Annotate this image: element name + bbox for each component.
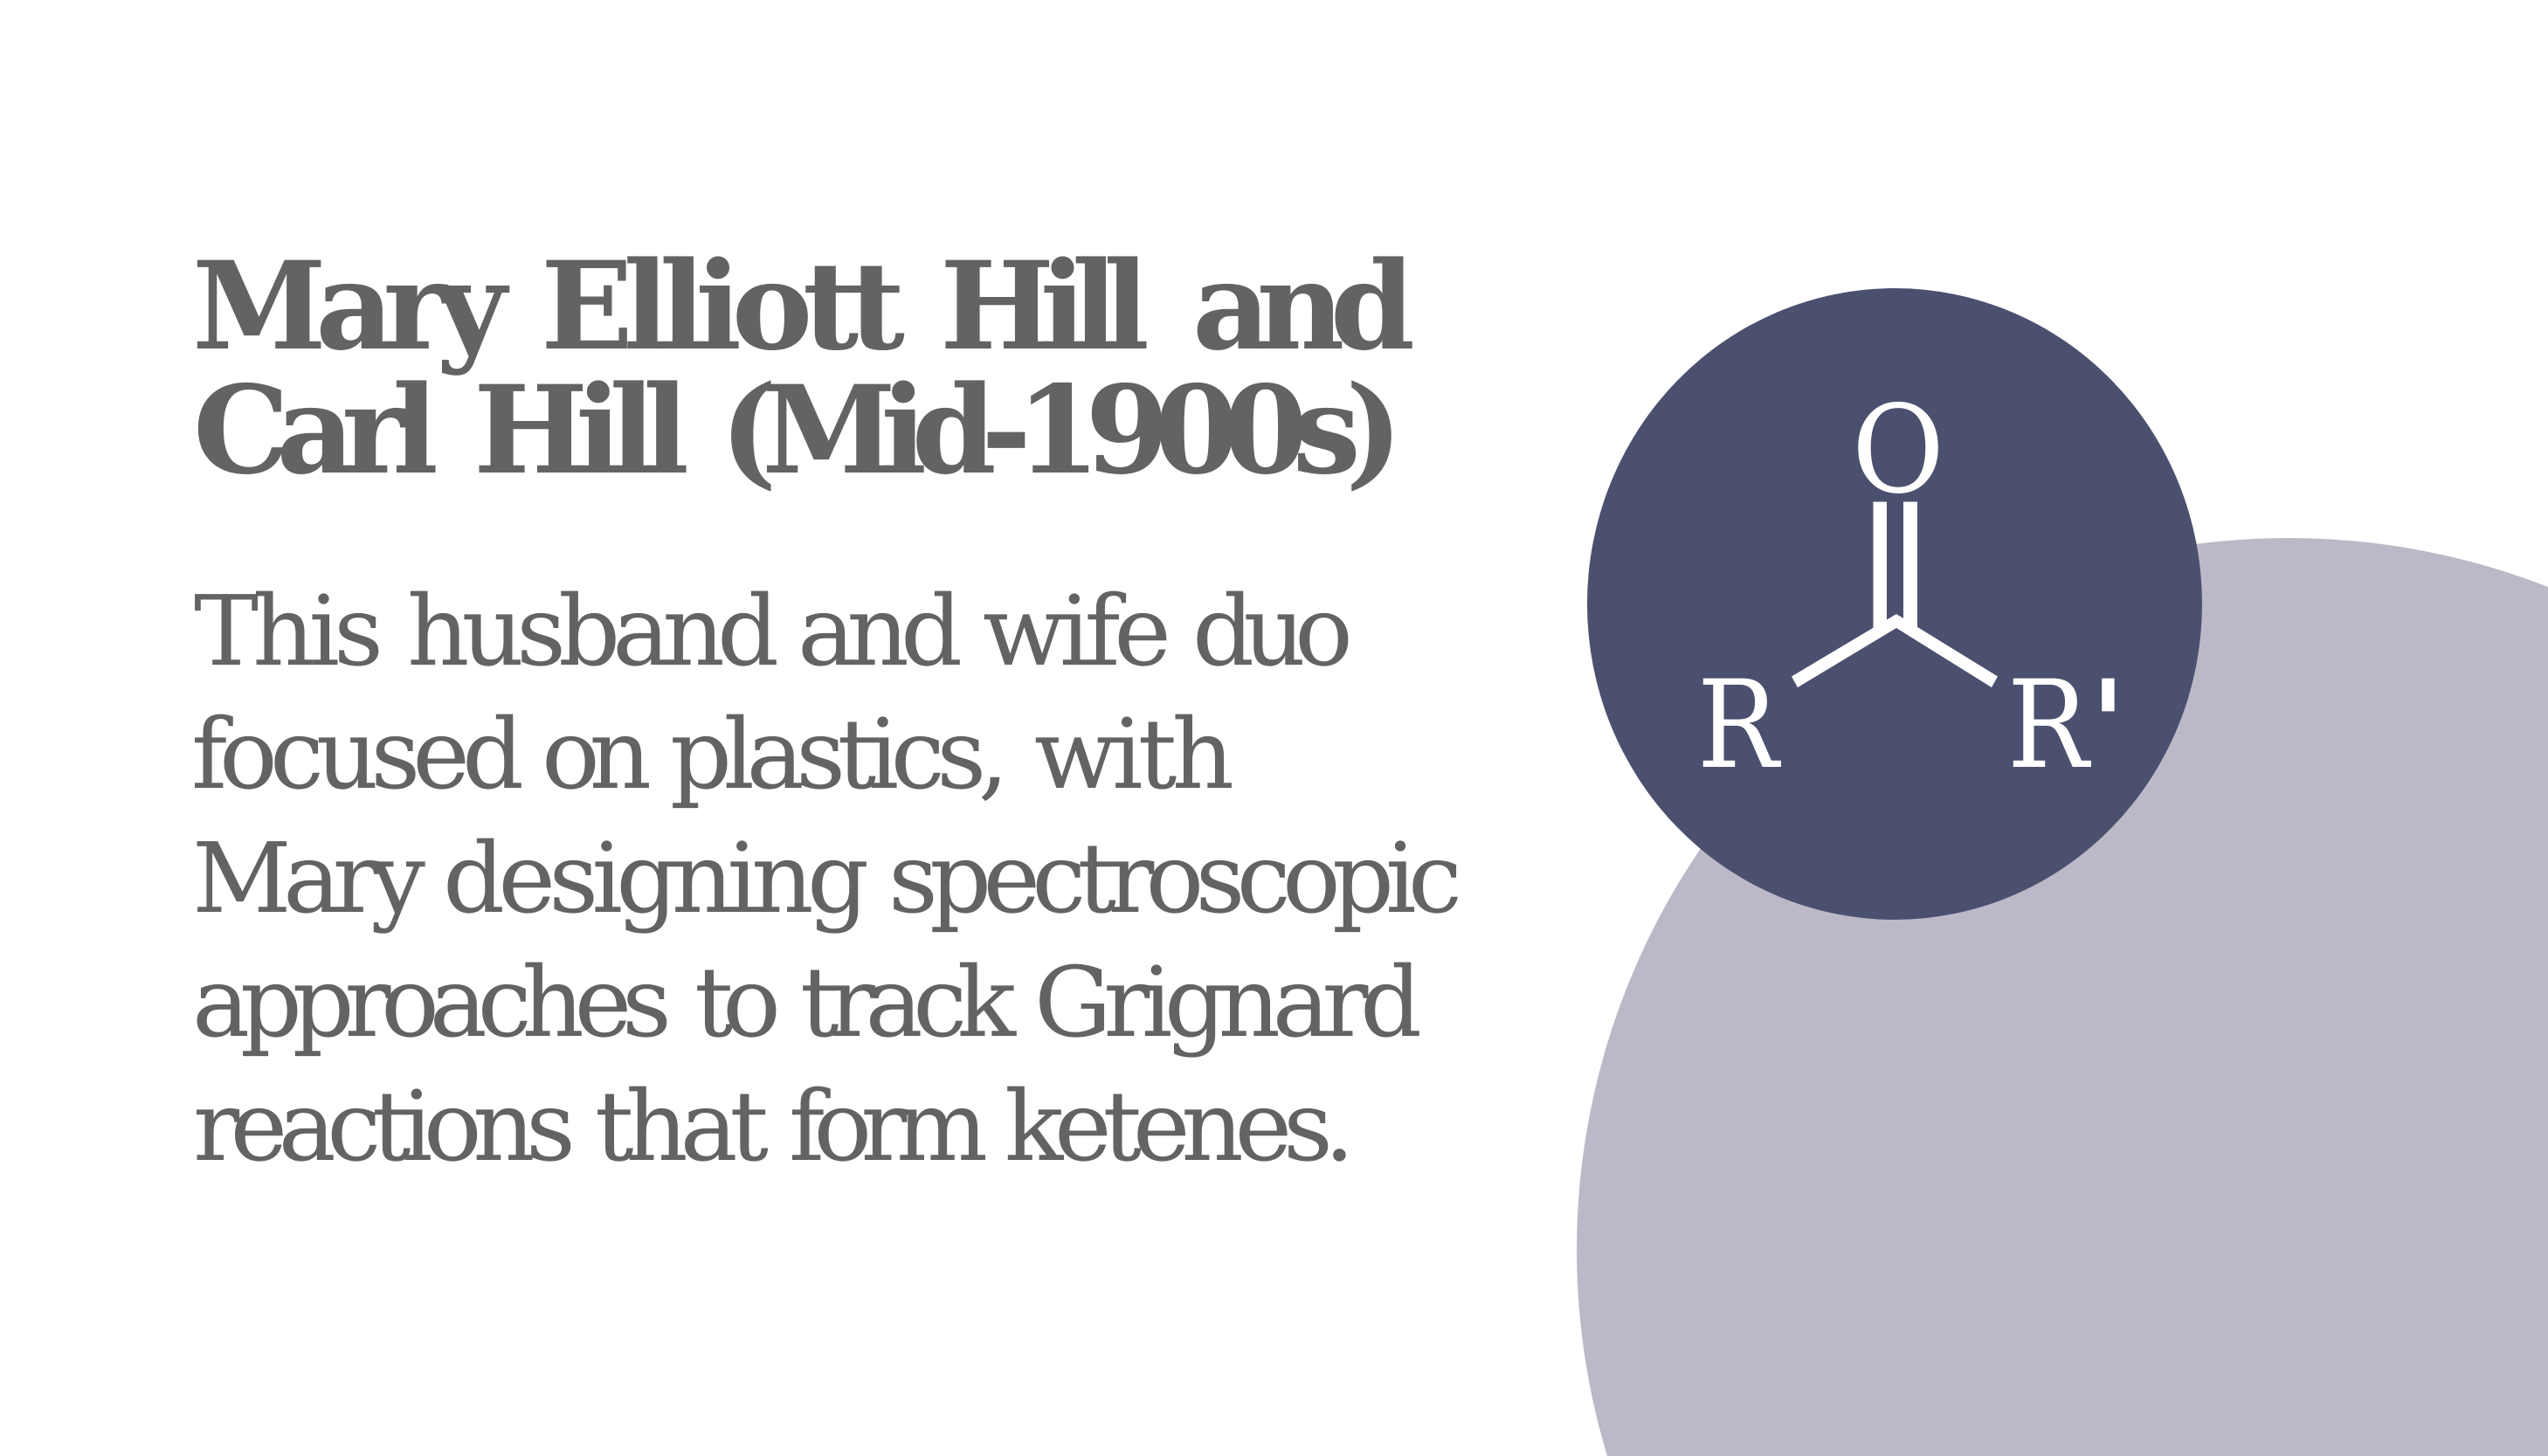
body text: This <box>194 576 383 688</box>
body text: plastics, <box>670 699 1009 811</box>
body text: track <box>800 947 1018 1059</box>
body text: that <box>595 1071 769 1183</box>
body text: focused <box>191 699 524 811</box>
body text: with <box>1034 699 1234 811</box>
body text <box>191 576 1462 1183</box>
atom labels: R <box>1697 654 1781 796</box>
title: Hill <box>473 358 689 501</box>
body text: on <box>542 699 652 811</box>
body text: and <box>798 576 963 688</box>
title <box>192 234 1415 501</box>
title: Elliott <box>541 234 905 377</box>
title: Carl <box>193 358 438 501</box>
body text: form <box>789 1071 988 1183</box>
body text: approaches <box>192 947 672 1059</box>
atom labels: R <box>2007 654 2091 796</box>
background decorative large circle <box>1577 538 2548 1456</box>
title: Mary <box>192 234 510 377</box>
title: and <box>1192 234 1415 377</box>
atom labels: O <box>1852 379 1944 521</box>
title: (Mid-1900s) <box>720 358 1403 501</box>
body text: ketenes. <box>1005 1071 1355 1183</box>
title: Hill <box>940 234 1150 377</box>
dark circle with carbonyl molecule icon <box>1587 288 2202 920</box>
atom labels: ' <box>2086 654 2130 796</box>
body text: reactions <box>193 1071 576 1183</box>
atom labels <box>1697 379 2130 796</box>
body text: wife <box>983 576 1171 688</box>
body text: Mary <box>192 823 425 935</box>
body text: to <box>694 947 781 1059</box>
body text: spectroscopic <box>888 823 1462 935</box>
body text: Grignard <box>1034 947 1422 1059</box>
body text: designing <box>443 823 869 935</box>
body text: duo <box>1192 576 1353 688</box>
body text: husband <box>407 576 779 688</box>
icon: carbonyl structure bonds <box>1792 501 1998 687</box>
